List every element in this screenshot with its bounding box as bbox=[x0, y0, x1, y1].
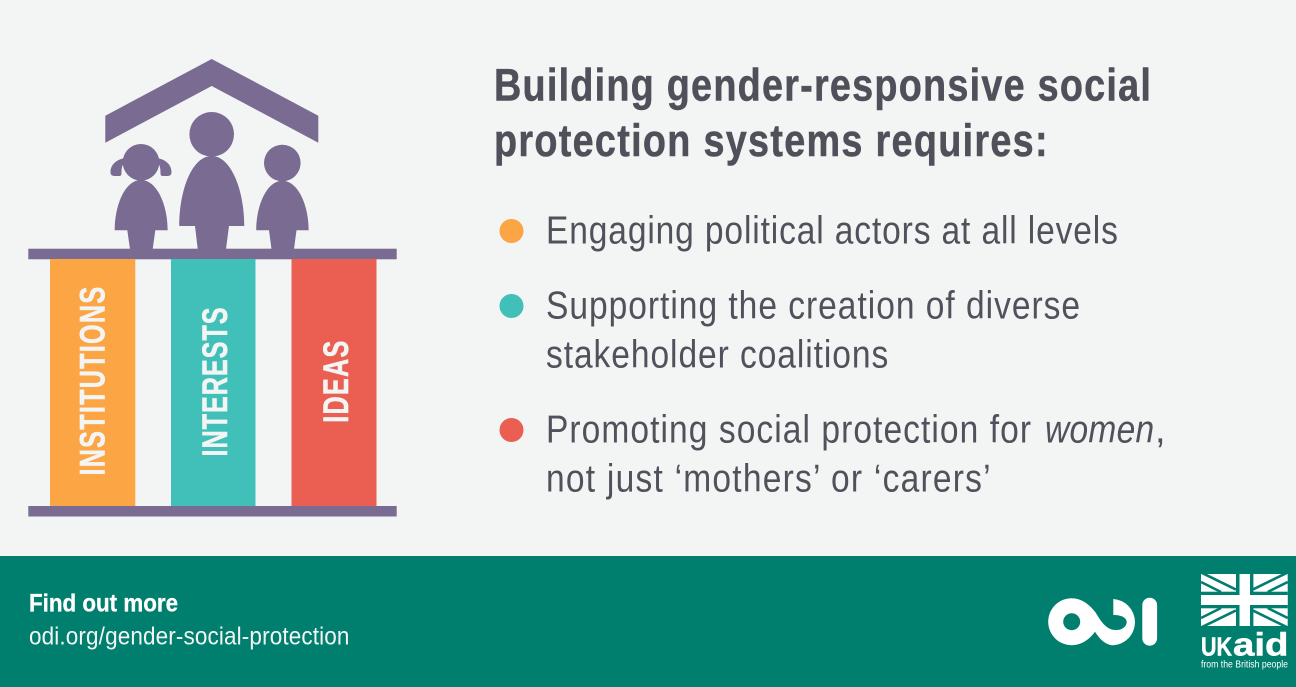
heading: protection systems requires: bbox=[494, 115, 1048, 166]
heading bbox=[494, 60, 1151, 166]
icon: house roof bbox=[105, 59, 318, 143]
bullet: stakeholder coalitions: Supporting the creation of diverse bbox=[546, 283, 1080, 327]
pillar: ideas: IDEAS bbox=[317, 341, 356, 423]
icon: boy figure bbox=[256, 145, 309, 249]
logo: ODI bbox=[1048, 598, 1157, 646]
bullet: women: not just ‘mothers’ or ‘carers’ bbox=[546, 456, 991, 500]
footer link text bbox=[29, 590, 349, 651]
pillar: interests: INTERESTS bbox=[196, 307, 235, 456]
icon: girl figure bbox=[110, 144, 172, 249]
bullet: stakeholder coalitions bbox=[500, 283, 1080, 376]
pillar: institutions bbox=[50, 259, 135, 506]
footer band bbox=[0, 556, 1296, 687]
logo: UK aid bbox=[1201, 572, 1288, 670]
icon: adult figure bbox=[179, 112, 244, 249]
pillar: institutions: INSTITUTIONS bbox=[74, 287, 113, 476]
bullet: women: , bbox=[1155, 410, 1166, 452]
icon: union flag bbox=[1201, 572, 1288, 628]
heading: Building gender-responsive social bbox=[494, 60, 1151, 110]
bullet: political actors: Engaging political actors at all levels bbox=[546, 208, 1118, 252]
pillar: ideas bbox=[292, 259, 376, 506]
top beam bbox=[28, 249, 397, 259]
bullet: women bbox=[500, 407, 1166, 500]
footer link text: odi.org/gender-social-protection bbox=[29, 622, 349, 651]
bullet: stakeholder coalitions: stakeholder coalitions bbox=[546, 332, 888, 376]
footer link text: Find out more bbox=[29, 590, 178, 618]
logo: UK aid: UK bbox=[1201, 631, 1232, 661]
illustration: family under roof on three pillars bbox=[28, 59, 397, 516]
base beam bbox=[28, 506, 397, 516]
bullet: women: Promoting social protection for bbox=[546, 407, 1031, 451]
pillar: interests bbox=[171, 259, 256, 506]
logo: UK aid: aid bbox=[1233, 626, 1288, 662]
bullet: women: women bbox=[1045, 407, 1154, 451]
